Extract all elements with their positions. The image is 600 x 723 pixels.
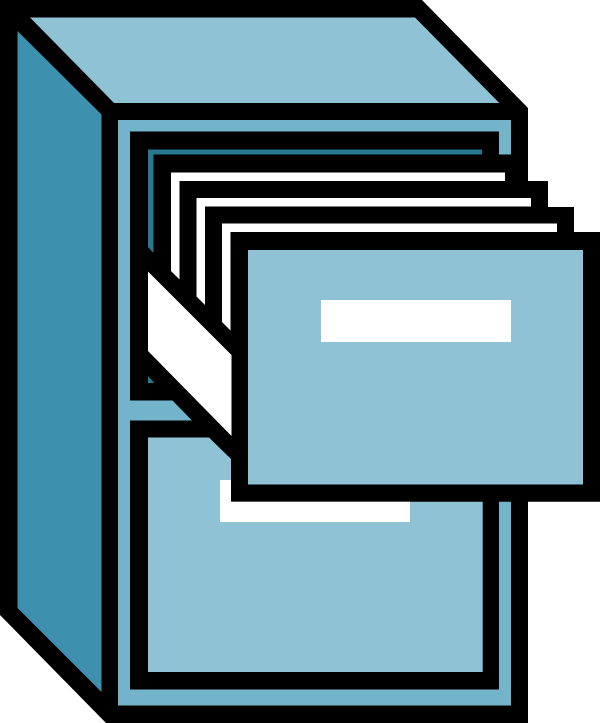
file folders in open drawer: [171, 172, 557, 330]
open drawer side panel: [148, 272, 232, 436]
cabinet side face: [18, 31, 102, 692]
folder 2: [196, 198, 531, 305]
lower drawer front: [148, 438, 483, 672]
open drawer front: [248, 250, 583, 484]
folder 1: [171, 172, 505, 280]
open drawer label: [321, 300, 511, 342]
lower drawer label: [220, 480, 410, 522]
cabinet top face: [30, 18, 499, 103]
cabinet front face: [118, 120, 511, 706]
folder 3: [222, 224, 557, 330]
open drawer interior: [148, 150, 482, 383]
